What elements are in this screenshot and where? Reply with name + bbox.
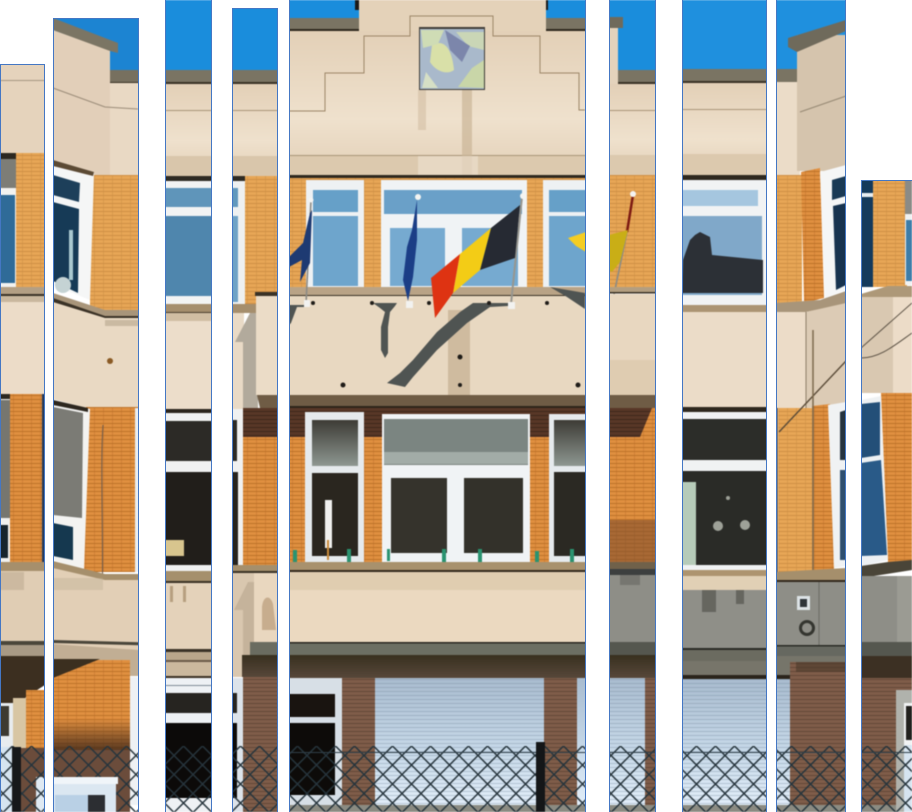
ground window edge — [232, 678, 243, 812]
roller shutters — [375, 678, 586, 806]
middle window, first floor — [381, 180, 527, 288]
roller shutter — [776, 679, 790, 806]
ground floor window — [289, 678, 342, 806]
wall device — [797, 596, 814, 634]
fence post — [12, 747, 21, 812]
lower window edge — [861, 396, 888, 566]
mosaic panel — [419, 27, 485, 90]
lower corner window — [53, 399, 90, 570]
parapet cap — [53, 18, 118, 53]
left window, second floor — [305, 412, 364, 563]
upper window edge — [861, 178, 874, 287]
Belgian flag — [431, 193, 526, 318]
upper window — [0, 153, 18, 287]
brick shadow — [609, 408, 652, 437]
upper right window — [905, 178, 912, 285]
strip 3: window slice — [165, 0, 212, 812]
upper wall — [289, 0, 586, 178]
strip 9: far right slice — [861, 180, 912, 812]
parapet cap — [788, 20, 846, 52]
yellow flag and pole — [609, 191, 636, 307]
ground floor window — [165, 678, 212, 812]
strip 5: central facade slice — [289, 0, 586, 812]
middle window, second floor — [382, 414, 530, 563]
strip 4: window and balcony edge slice — [232, 8, 278, 812]
fence post — [536, 742, 545, 812]
strip 7: reflective window slice — [682, 0, 767, 812]
ground window edge — [896, 690, 912, 812]
lower window edge — [232, 409, 243, 571]
anchor bolts — [311, 301, 580, 388]
security camera — [104, 358, 116, 423]
roller shutter — [609, 678, 645, 806]
lower window — [682, 412, 767, 570]
strip 8: right corner tower slice — [776, 0, 846, 812]
utility box — [38, 777, 118, 812]
lower window — [165, 409, 212, 571]
upper window edge — [232, 176, 245, 305]
strip 2: left corner tower slice — [53, 18, 139, 812]
right window, first floor — [543, 180, 586, 288]
lower window — [0, 394, 13, 564]
upper corner window — [820, 165, 846, 298]
balcony shadow — [235, 313, 258, 409]
centre blue flag — [403, 194, 421, 308]
overhead cable — [779, 361, 846, 432]
left flag — [289, 198, 314, 307]
flag shadows — [289, 287, 585, 387]
upper window with reflection — [682, 180, 767, 305]
balcony — [289, 287, 586, 408]
upper window — [165, 176, 212, 305]
lower corner window — [828, 402, 846, 568]
roller shutter — [682, 679, 767, 806]
overhead wires — [861, 303, 912, 358]
upper corner window — [53, 160, 94, 300]
lower balcony — [289, 562, 586, 655]
right window, second floor — [549, 414, 586, 563]
left window, first floor — [306, 180, 364, 288]
strip 1: far left facade slice — [0, 64, 45, 812]
strip 6: yellow flag slice — [609, 0, 656, 812]
